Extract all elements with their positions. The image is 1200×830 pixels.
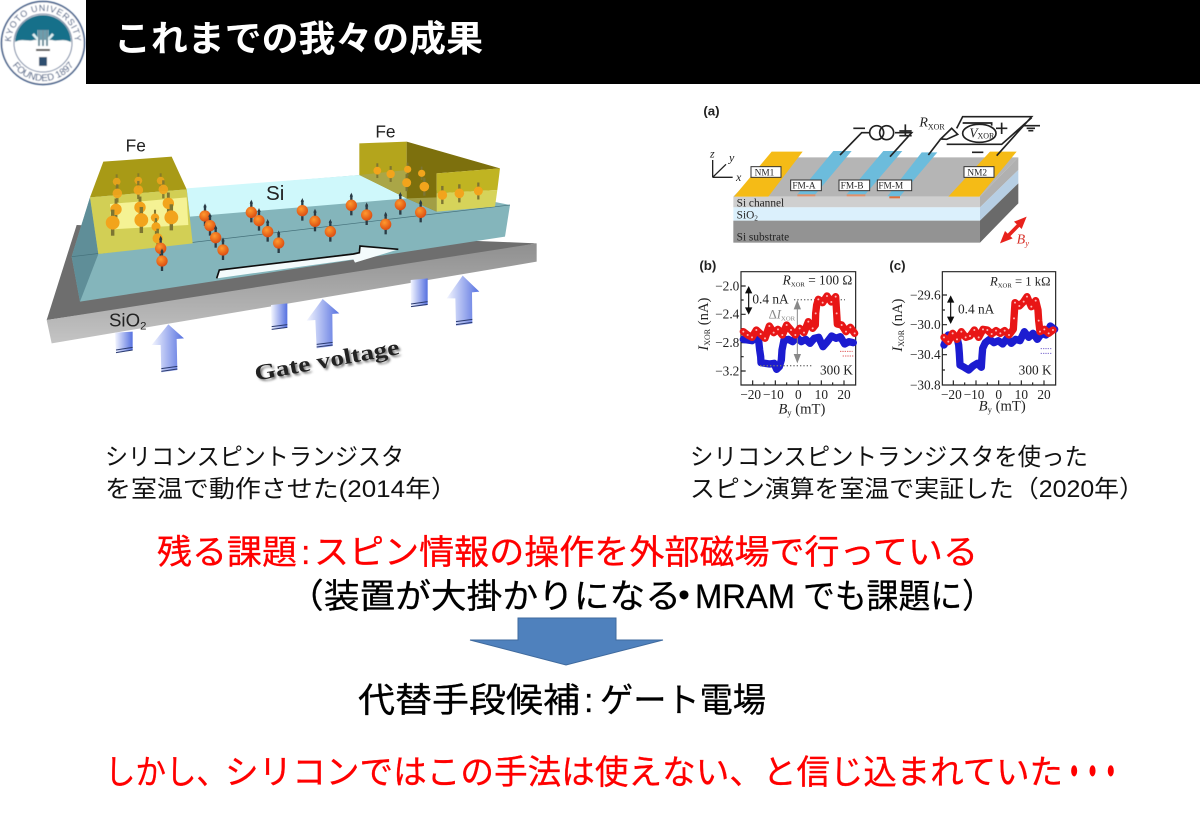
x axis ticks: 0 <box>795 387 802 402</box>
label: V XOR: V <box>969 126 977 141</box>
label: FM-A <box>791 180 821 192</box>
label: V XOR: XOR <box>977 131 995 140</box>
alternative method text: ゲート電場 <box>600 682 766 720</box>
arrow: down <box>470 618 663 665</box>
icon: xyz axes: x <box>735 170 742 184</box>
panel label b: (b) <box>699 258 716 273</box>
label: NM1: NM1 <box>755 168 775 178</box>
axis title x: (mT) <box>992 399 1026 415</box>
caption: left result: を室温で動作させた(2014年） <box>105 476 457 503</box>
y axis ticks: −29.6 <box>910 287 941 302</box>
label: FM-M: FM-M <box>878 182 904 192</box>
annotation R XOR: = 100 Ω <box>805 272 852 287</box>
SiO2 layer <box>47 225 537 343</box>
annotation 300 K: 300 K <box>1019 363 1052 378</box>
alternative method text <box>358 682 766 720</box>
icon: Kyoto University logo: KYOTO UNIVERSITY <box>4 4 82 42</box>
caption: left result: シリコンスピントランジスタ <box>105 444 404 471</box>
blue series <box>944 326 1055 370</box>
parenthetical note: （装置が大掛かりになる <box>288 578 681 616</box>
annotation delta I <box>760 300 845 366</box>
x axis ticks: 20 <box>1037 387 1051 402</box>
x axis ticks: −10 <box>763 387 784 402</box>
conclusion text: と信じ込まれていた <box>763 754 1063 792</box>
axis title y: I <box>890 346 906 353</box>
label: SiO2 layer: SiO <box>737 210 754 222</box>
x axis ticks <box>941 387 1051 402</box>
legend arrows <box>1041 349 1052 353</box>
annotation R XOR: = 1 kΩ <box>1012 274 1050 288</box>
icon: By double arrow: B <box>1017 232 1025 247</box>
x axis ticks: 10 <box>815 387 828 402</box>
icon: Kyoto University logo <box>0 0 86 86</box>
x axis ticks: 0 <box>995 387 1002 402</box>
annotation 0.4 nA: 0.4 nA <box>752 291 789 306</box>
caption: right result: シリコンスピントランジスタを使った <box>690 444 1088 471</box>
x axis ticks: 20 <box>837 387 851 402</box>
y axis ticks: −30.4 <box>910 347 941 362</box>
x axis ticks: −20 <box>941 387 962 402</box>
annotation R XOR: R <box>989 274 998 288</box>
remaining challenge text: : <box>301 534 310 572</box>
label: R XOR: XOR <box>928 122 945 131</box>
label: Si substrate: Si substrate <box>737 231 789 243</box>
label: NM2 <box>964 167 994 178</box>
panel label c: (c) <box>889 258 906 273</box>
parenthetical note: ・ <box>667 578 701 616</box>
annotation delta I: ΔI <box>769 307 781 321</box>
label: Fe right: Fe <box>375 122 396 142</box>
remaining challenge text: スピン情報の操作を外部磁場で行っている <box>314 534 978 572</box>
icon: xyz axes <box>709 147 742 184</box>
chart (c): I XOR vs By at 1 kilo-ohm <box>889 258 1056 415</box>
axis title x: B <box>778 401 787 417</box>
annotation 0.4 nA <box>745 286 789 315</box>
y axis ticks: −30.8 <box>910 377 941 392</box>
arrow: current direction <box>217 246 398 278</box>
header bar <box>86 0 1200 84</box>
y axis ticks: −3.2 <box>715 363 739 378</box>
x axis ticks <box>740 387 851 402</box>
Fe electrode right <box>359 142 500 212</box>
annotation 0.4 nA: 0.4 nA <box>958 301 995 316</box>
label: Si channel: Si channel <box>737 197 784 209</box>
y axis ticks: −30.0 <box>910 317 941 332</box>
label: Gate voltage: Gate voltage <box>252 334 401 386</box>
annotation 300 K: 300 K <box>820 363 853 378</box>
label: NM1 <box>751 167 781 178</box>
axis title x: B <box>979 399 988 415</box>
device layers <box>733 157 1018 243</box>
axis title x: y <box>988 405 993 415</box>
y axis ticks: −2.8 <box>715 335 740 350</box>
icon: gate voltage arrows <box>115 276 479 372</box>
label: Gate voltage <box>252 334 403 388</box>
axis title y: I <box>696 345 712 352</box>
spin electrons inside Fe <box>106 163 483 248</box>
remaining challenge text: 残る課題 <box>157 534 297 572</box>
y axis ticks: −2.0 <box>715 278 740 293</box>
blue series <box>743 336 853 369</box>
parenthetical note: でも課題に） <box>803 578 994 616</box>
label: FM-B: FM-B <box>841 182 863 192</box>
label: SiO2: 2 <box>140 320 146 332</box>
label: Gate voltage: Gate voltage <box>254 336 403 388</box>
parenthetical note: MRAM <box>695 578 795 616</box>
label: SiO2: SiO <box>109 310 140 331</box>
diagram (a): device schematic <box>703 104 1040 248</box>
diagram: silicon spin transistor <box>47 122 537 388</box>
plot frame <box>741 272 856 385</box>
conclusion text: シリコンではこの手法は使えない、 <box>225 754 763 792</box>
red series <box>944 297 1053 342</box>
icon: Kyoto University logo: FOUNDED 1897 <box>12 61 72 82</box>
axis title y: (nA) <box>890 298 906 330</box>
panel label a: (a) <box>703 104 720 119</box>
chart (b): I XOR vs By at 100 ohm <box>696 258 856 417</box>
axis title x: (mT) <box>792 401 826 417</box>
annotation 0.4 nA <box>947 295 995 324</box>
caption: left result <box>105 444 457 503</box>
spin electrons in channel <box>155 192 426 271</box>
axis title y: (nA) <box>696 297 712 329</box>
circuit wiring <box>840 117 1040 157</box>
axis title y: XOR <box>897 329 906 347</box>
axis title x: y <box>787 407 792 417</box>
label: FM-A: FM-A <box>792 182 816 192</box>
annotation R XOR: R <box>782 272 791 287</box>
annotation delta I: XOR <box>781 315 796 322</box>
x axis ticks: −10 <box>964 387 985 402</box>
alternative method text: 代替手段候補 <box>358 682 580 720</box>
alternative method text: : <box>584 682 593 720</box>
Si channel block <box>72 175 510 302</box>
caption: right result <box>690 444 1144 503</box>
label: R XOR: R <box>919 116 928 131</box>
label: SiO2 layer: 2 <box>754 214 758 223</box>
red series <box>743 296 855 338</box>
label: Si: Si <box>266 182 284 205</box>
y axis ticks <box>910 287 941 392</box>
label: FM-M <box>877 180 912 192</box>
Fe electrode left <box>90 157 193 254</box>
electrodes <box>734 151 1017 198</box>
title: これまでの我々の成果 <box>114 18 483 59</box>
legend arrows <box>840 351 853 356</box>
label: NM2: NM2 <box>967 168 987 178</box>
parenthetical note <box>288 578 994 616</box>
annotation R XOR: XOR <box>791 281 805 288</box>
conclusion text: ・・・ <box>1065 754 1120 792</box>
y axis ticks <box>715 278 740 378</box>
conclusion text: しかし、 <box>105 754 227 792</box>
label: FM-B <box>839 180 870 192</box>
y axis ticks: −2.4 <box>715 307 740 322</box>
icon: By double arrow: y <box>1024 238 1029 248</box>
x axis ticks: −20 <box>740 387 761 402</box>
annotation R XOR: XOR <box>998 282 1012 289</box>
label: Fe left: Fe <box>126 136 146 156</box>
caption: right result: スピン演算を室温で実証した（2020年） <box>690 476 1144 503</box>
axis title y: XOR <box>703 328 712 346</box>
icon: xyz axes: y <box>728 151 735 165</box>
plot frame <box>942 272 1056 385</box>
x axis ticks: 10 <box>1015 387 1028 402</box>
icon: By double arrow <box>1000 217 1029 248</box>
conclusion text <box>105 754 1120 792</box>
icon: xyz axes: z <box>709 147 715 161</box>
